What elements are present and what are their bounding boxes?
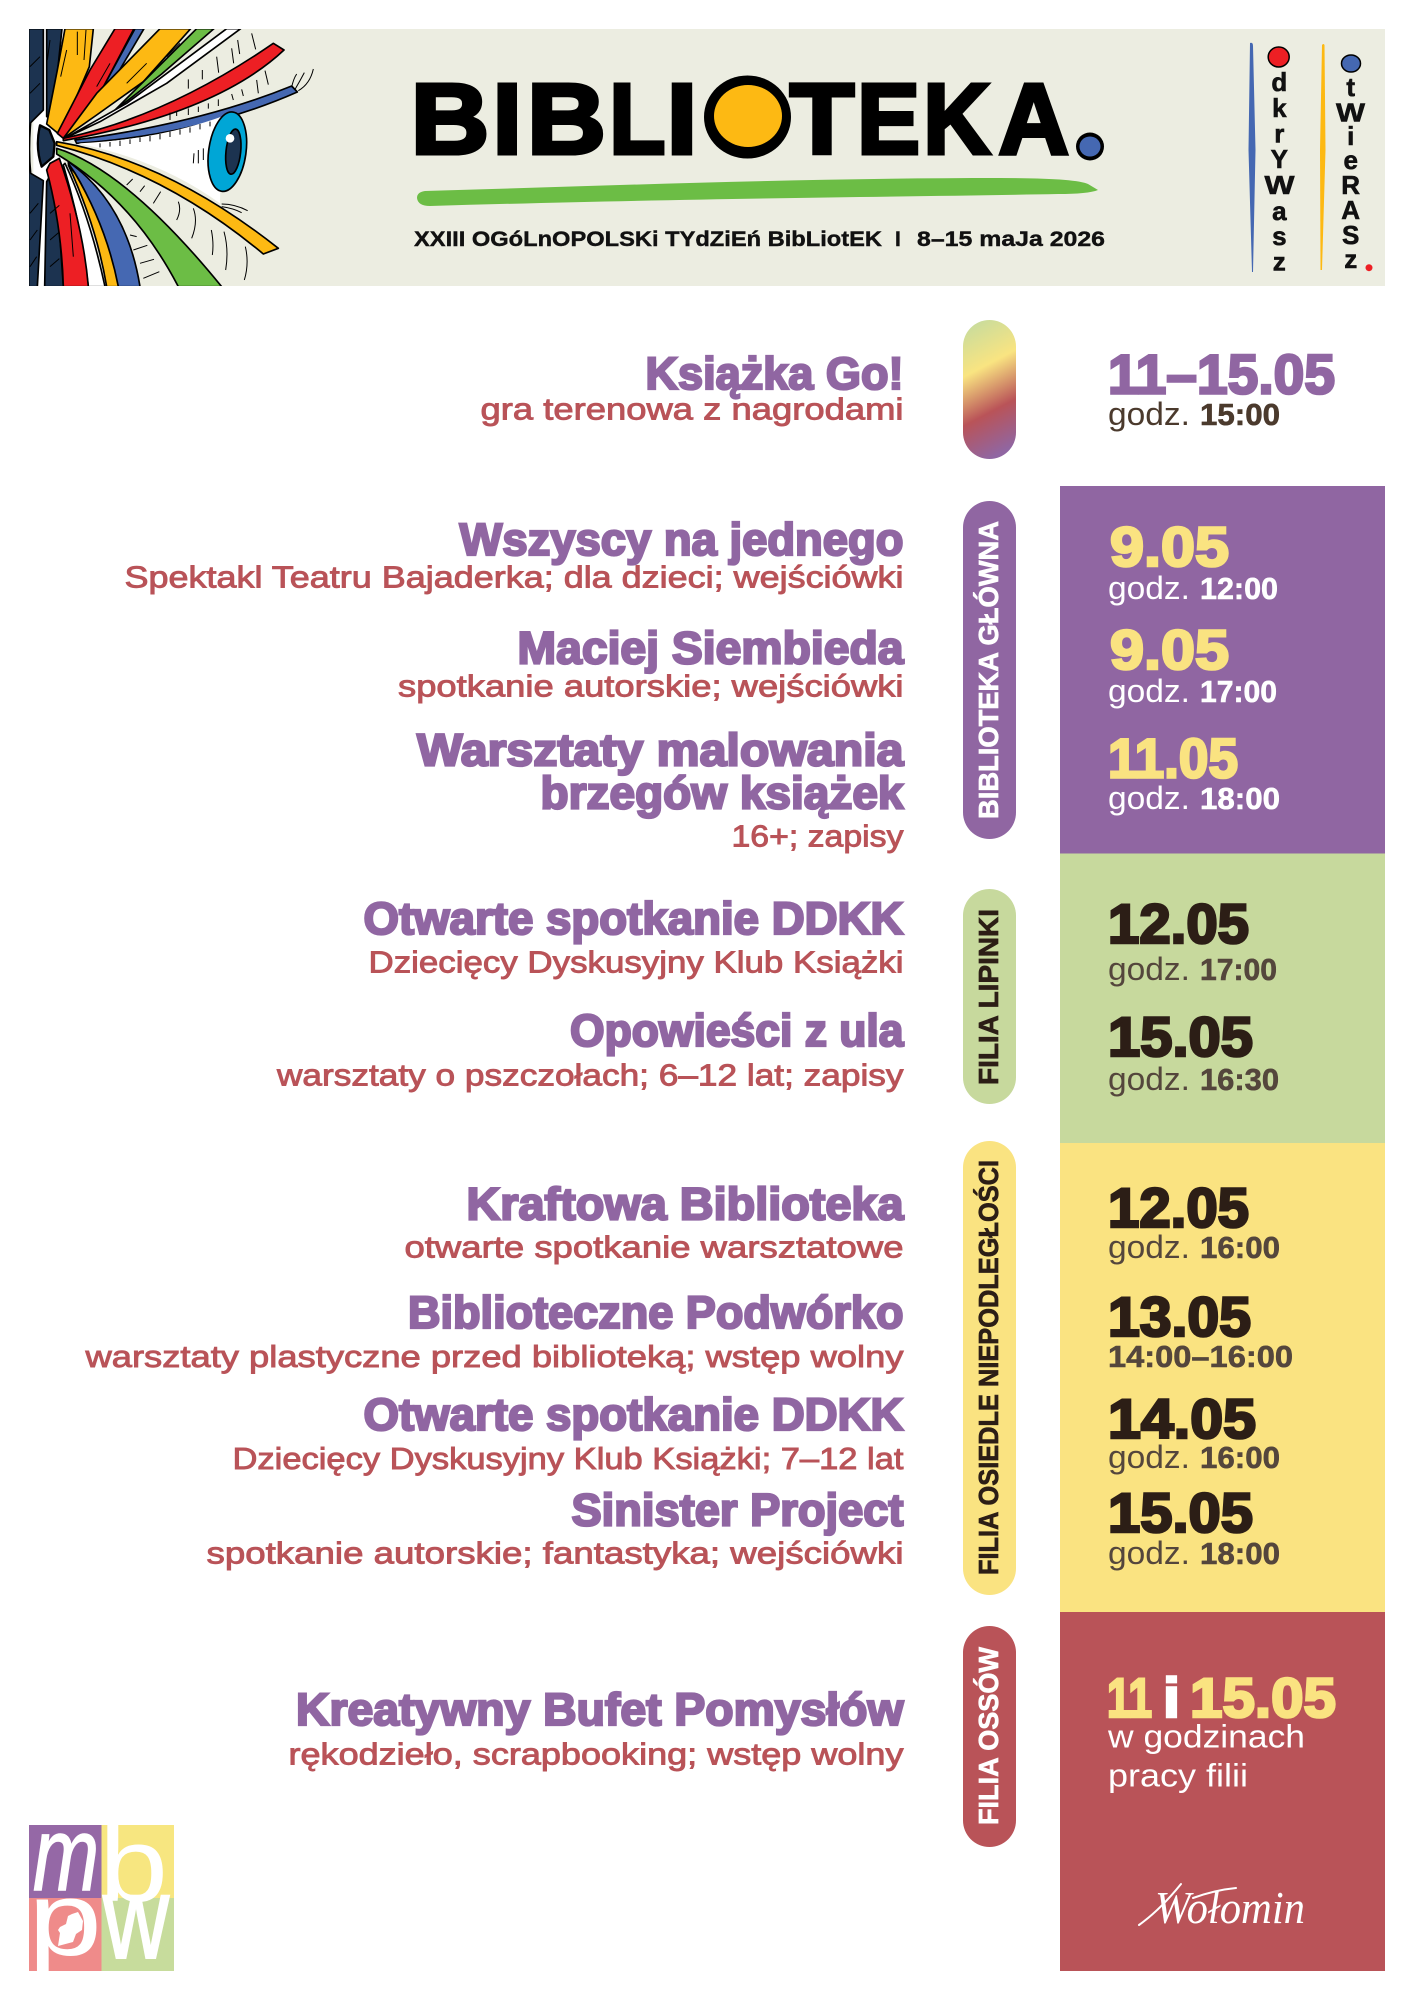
dates: Biblioteka Główna: 12:00 — [1200, 571, 1278, 606]
event: Książka Go: gra terenowa z nagrodami — [480, 392, 904, 427]
vertical slogan: odkrywasz: Y — [1271, 144, 1288, 174]
illustration: open book and eye — [29, 29, 313, 287]
logo: MBP W: m — [33, 1797, 99, 1913]
vertical slogan: odkrywasz: a — [1272, 196, 1287, 226]
event: Kraftowa Biblioteka: otwarte spotkanie warsztatowe — [404, 1230, 904, 1265]
dates: Filia Osiedle Niepodległości: 16:00 — [1200, 1440, 1280, 1475]
event: Otwarte spotkanie DDKK (Niepodległości): Dziecięcy Dyskusyjny Klub Książki; 7–12 lat — [232, 1441, 904, 1476]
dates: Biblioteka Główna: 11.05 — [1108, 726, 1238, 790]
title: BIBLIOTEKA: B — [527, 63, 606, 175]
dates: Biblioteka Główna — [1108, 515, 1280, 816]
event: Wszyscy na jednego: Spektakl Teatru Bajaderka; dla dzieci; wejściówki — [124, 560, 904, 595]
title: BIBLIOTEKA: K — [923, 63, 990, 175]
dates: Filia Osiedle Niepodległości: godz. — [1108, 1535, 1190, 1571]
vertical slogan: odkrywasz — [1248, 43, 1295, 277]
signature: Wołomin: Wołomin — [1155, 1882, 1305, 1933]
vertical slogan: otwierasz: z — [1344, 244, 1357, 274]
event: Maciej Siembieda — [398, 622, 904, 704]
event: Opowieści z ula: Opowieści z ula — [570, 1005, 904, 1056]
event: Kreatywny Bufet Pomysłów: rękodzieło, scrapbooking; wstęp wolny — [288, 1737, 904, 1772]
subtitle tagline: XXIII OGóLnOPOLSKi TYdZiEń BibLiotEK — [414, 228, 882, 251]
dates: Filia Lipinki: godz. — [1108, 951, 1190, 987]
event: Książka Go: Książka Go! — [646, 348, 904, 399]
dates: Biblioteka Główna: godz. — [1108, 570, 1190, 606]
event: Otwarte spotkanie DDKK (Niepodległości) — [232, 1389, 904, 1476]
title: BIBLIOTEKA — [411, 62, 1104, 175]
event: Otwarte spotkanie DDKK (Lipinki): Otwarte spotkanie DDKK — [364, 893, 904, 944]
green brush stroke — [417, 178, 1098, 206]
event: Opowieści z ula: warsztaty o pszczołach; 6–12 lat; zapisy — [276, 1058, 904, 1093]
dates: Filia Ossów: pracy filii — [1108, 1758, 1248, 1794]
dates: Filia Lipinki: 17:00 — [1200, 952, 1277, 987]
dates: Biblioteka Główna: 9.05 — [1110, 618, 1229, 681]
pill: Filia Osiedle Niepodległości: FILIA OSIEDLE NIEPODLEGŁOŚCI — [973, 1160, 1004, 1575]
event: Opowieści z ula — [276, 1005, 904, 1093]
event: Biblioteczne Podwórko: warsztaty plastyczne przed biblioteką; wstęp wolny — [84, 1339, 904, 1374]
dates: Filia Lipinki: 15.05 — [1108, 1005, 1253, 1068]
dates: Filia Lipinki — [1108, 892, 1279, 1097]
date: 11–15.05 — [1108, 342, 1335, 432]
logo: MBP W — [28, 1797, 174, 1984]
dates: Filia Lipinki: 12.05 — [1108, 892, 1249, 955]
dates: Filia Osiedle Niepodległości: 14:00–16:00 — [1108, 1339, 1293, 1374]
pill: Biblioteka Główna: BIBLIOTEKA GŁÓWNA — [973, 521, 1004, 819]
vertical slogan: odkrywasz: r — [1274, 119, 1284, 149]
panel: header banner — [29, 29, 1385, 287]
title: BIBLIOTEKA: T — [790, 63, 854, 175]
dates: Filia Osiedle Niepodległości: 13.05 — [1108, 1285, 1251, 1348]
panel: colour blocks — [1060, 486, 1385, 1971]
event: Warsztaty malowania brzegów książek: Warsztaty malowania — [417, 724, 905, 776]
dates: Filia Ossów: 15.05 — [1190, 1666, 1336, 1729]
event: Sinister Project: Sinister Project — [572, 1484, 904, 1536]
pill: Filia Lipinki — [963, 889, 1016, 1104]
event: Książka Go — [480, 348, 904, 427]
vertical slogan: otwierasz: A — [1341, 195, 1360, 225]
dates: Filia Osiedle Niepodległości: 18:00 — [1200, 1536, 1280, 1571]
dates: Biblioteka Główna: 18:00 — [1200, 781, 1280, 816]
subtitle tagline — [414, 228, 1105, 251]
title: BIBLIOTEKA: I — [492, 63, 522, 175]
event: Biblioteczne Podwórko: Biblioteczne Podwórko — [408, 1287, 904, 1338]
vertical slogan: otwierasz: S — [1342, 220, 1359, 250]
title: BIBLIOTEKA: E — [857, 63, 920, 175]
dates: Filia Osiedle Niepodległości: 15.05 — [1108, 1481, 1253, 1544]
date: 11–15.05: 15:00 — [1200, 397, 1280, 432]
pill: Filia Osiedle Niepodległości — [963, 1141, 1016, 1595]
dates: Filia Osiedle Niepodległości: godz. — [1108, 1439, 1190, 1475]
vertical slogan: odkrywasz: W — [1264, 170, 1295, 200]
vertical slogan: otwierasz: R — [1341, 170, 1360, 200]
title: BIBLIOTEKA: L — [609, 63, 666, 175]
vertical slogan: odkrywasz: s — [1272, 221, 1287, 251]
event: Warsztaty malowania brzegów książek — [417, 724, 905, 854]
event: Sinister Project — [206, 1484, 904, 1571]
title: BIBLIOTEKA: A — [998, 63, 1069, 175]
dates: Filia Lipinki: godz. — [1108, 1061, 1190, 1097]
dates: Biblioteka Główna: 9.05 — [1110, 515, 1229, 578]
pill: Filia Ossów — [963, 1626, 1016, 1847]
dates: Biblioteka Główna: godz. — [1108, 673, 1190, 709]
vertical slogan: odkrywasz: k — [1272, 93, 1287, 123]
event: Warsztaty malowania brzegów książek: 16+; zapisy — [732, 819, 904, 854]
vertical slogan: otwierasz: t — [1346, 72, 1355, 102]
dates: Filia Osiedle Niepodległości: 16:00 — [1200, 1230, 1280, 1265]
logo: MBP W: w — [102, 1852, 170, 1984]
event: Kraftowa Biblioteka — [404, 1178, 905, 1265]
pill: Filia Lipinki: FILIA LIPINKI — [973, 909, 1004, 1085]
dates: Filia Ossów: 11 — [1107, 1666, 1152, 1729]
vertical slogan: odkrywasz: d — [1271, 67, 1287, 97]
pill: gradient — [963, 320, 1016, 459]
dates: Filia Osiedle Niepodległości: 14.05 — [1108, 1387, 1256, 1450]
event: Kreatywny Bufet Pomysłów: Kreatywny Bufet Pomysłów — [296, 1684, 905, 1735]
vertical slogan: otwierasz — [1320, 44, 1372, 274]
event: Wszyscy na jednego — [124, 514, 904, 595]
dates: Filia Ossów: i — [1163, 1666, 1180, 1729]
dates: Biblioteka Główna: 17:00 — [1200, 674, 1277, 709]
subtitle tagline: 8–15 maJa 2026 — [917, 228, 1105, 251]
dates: Biblioteka Główna: godz. — [1108, 780, 1190, 816]
dates: Filia Osiedle Niepodległości — [1108, 1176, 1293, 1571]
vertical slogan: odkrywasz: z — [1273, 247, 1286, 277]
date: 11–15.05: 11–15.05 — [1108, 342, 1335, 406]
dates: Filia Ossów: w godzinach — [1107, 1718, 1305, 1754]
event: Maciej Siembieda: spotkanie autorskie; wejściówki — [398, 669, 904, 704]
event: Otwarte spotkanie DDKK (Lipinki): Dziecięcy Dyskusyjny Klub Książki — [368, 945, 904, 980]
dates: Filia Ossów — [1107, 1666, 1336, 1794]
vertical slogan: otwierasz: e — [1343, 145, 1358, 175]
title: BIBLIOTEKA: B — [411, 63, 489, 175]
dates: Filia Osiedle Niepodległości: godz. — [1108, 1229, 1190, 1265]
date: 11–15.05: godz. — [1108, 396, 1190, 432]
event: Wszyscy na jednego: Wszyscy na jednego — [460, 514, 904, 565]
event: Otwarte spotkanie DDKK (Lipinki) — [364, 893, 904, 980]
pill: Biblioteka Główna — [963, 501, 1016, 839]
dates: Filia Osiedle Niepodległości: 12.05 — [1108, 1176, 1249, 1239]
logo: MBP W: b — [99, 1807, 168, 1924]
event: Kreatywny Bufet Pomysłów — [288, 1684, 905, 1772]
title: BIBLIOTEKA: O — [708, 62, 786, 174]
vertical slogan: otwierasz: W — [1336, 98, 1366, 128]
title: BIBLIOTEKA: I — [666, 63, 697, 175]
event: Sinister Project: spotkanie autorskie; fantastyka; wejściówki — [206, 1536, 904, 1571]
event: Biblioteczne Podwórko — [84, 1287, 904, 1374]
event: Warsztaty malowania brzegów książek: brzegów książek — [540, 768, 904, 818]
logo: MBP W: p — [28, 1861, 102, 1978]
event: Maciej Siembieda: Maciej Siembieda — [518, 622, 904, 674]
event: Kraftowa Biblioteka: Kraftowa Biblioteka — [466, 1178, 905, 1230]
subtitle tagline: I — [895, 228, 901, 251]
vertical slogan: otwierasz: i — [1347, 121, 1354, 151]
dates: Filia Lipinki: 16:30 — [1200, 1062, 1279, 1097]
event: Otwarte spotkanie DDKK (Niepodległości): Otwarte spotkanie DDKK — [364, 1389, 904, 1440]
pill: Filia Ossów: FILIA OSSÓW — [973, 1646, 1004, 1825]
